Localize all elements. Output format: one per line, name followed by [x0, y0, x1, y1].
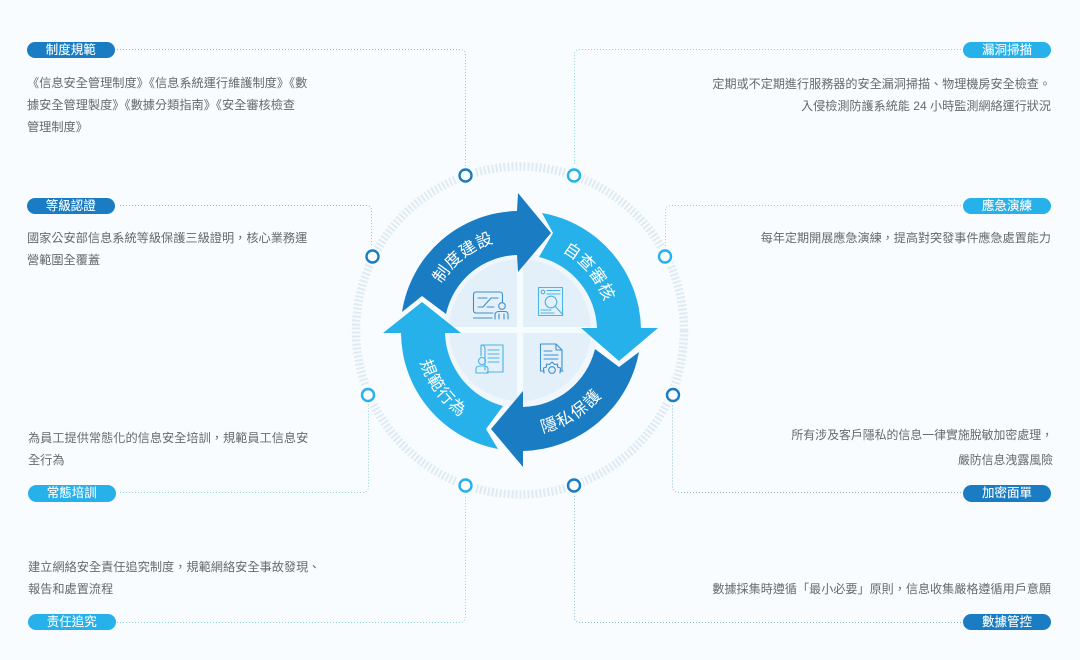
icon: document with gear: [540, 344, 563, 373]
tag: 责任追究: [28, 614, 116, 630]
text: 责任追究: 建立網絡安全責任追究制度，規範網絡安全事故發現、: [28, 560, 320, 574]
tag: 加密面單: 加密面單: [982, 486, 1032, 500]
text: 常態培訓: 為員工提供常態化的信息安全培訓，規範員工信息安: [28, 431, 308, 445]
text: 加密面單: 所有涉及客戶隱私的信息一律實施脫敏加密處理，: [791, 428, 1053, 442]
tag: 加密面單: [963, 485, 1051, 502]
arrow: 制度建設: [402, 193, 551, 314]
arrow: 規範行為: 規範行為: [419, 359, 465, 416]
text: 常態培訓: [28, 431, 308, 467]
tag: 制度規範: [27, 42, 114, 58]
text: 漏洞掃描: 定期或不定期進行服務器的安全漏洞掃描、物理機房安全檢查。: [712, 77, 1051, 91]
arrow: 制度建設: 制度建設: [432, 231, 494, 283]
text: 责任追究: [28, 560, 320, 596]
text: 等級認證: [27, 231, 307, 267]
arrow: 隱私保護: [491, 349, 639, 467]
tag: 常態培訓: [28, 485, 116, 502]
tag: 數據管控: 數據管控: [982, 614, 1032, 628]
text: 责任追究: 報告和處置流程: [28, 582, 113, 596]
tag: 漏洞掃描: 漏洞掃描: [982, 42, 1032, 56]
tag: 數據管控: [963, 614, 1051, 630]
inner disc: [440, 250, 600, 410]
text: 制度規範: 據安全管理製度》《數據分類指南》《安全審核檢查: [27, 98, 295, 112]
connector lines: [117, 50, 961, 622]
tag: 漏洞掃描: [963, 42, 1051, 58]
text: 等級認證: 國家公安部信息系統等級保護三級證明，核心業務運: [27, 231, 307, 245]
icon: presentation with person: [474, 292, 508, 319]
text: 等級認證: 營範圍全覆蓋: [27, 253, 100, 267]
text: 制度規範: 《信息安全管理制度》《信息系統運行維護制度》《數: [27, 76, 307, 90]
tag: 等級認證: [27, 198, 114, 214]
tag: 應急演練: 應急演練: [982, 198, 1032, 212]
connector node halos: [358, 166, 682, 495]
text: 加密面單: [791, 428, 1053, 467]
text: 應急演練: 每年定期開展應急演練，提高對突發事件應急處置能力: [761, 231, 1051, 245]
arrow: 自查審核: [539, 213, 658, 361]
text: 常態培訓: 全行為: [28, 453, 65, 467]
arrow: 規範行為: [383, 302, 503, 449]
icon: scroll with person: [476, 345, 503, 373]
connector nodes: [362, 170, 679, 492]
arrow: 自查審核: 自查審核: [564, 243, 616, 301]
text: 數據管控: 數據採集時遵循「最小必要」原則，信息收集嚴格遵循用戶意願: [712, 582, 1051, 596]
tag: 责任追究: 责任追究: [47, 614, 97, 628]
tag: 等級認證: 等級認證: [46, 198, 96, 212]
icon: document magnifier: [538, 288, 563, 316]
tag: 制度規範: 制度規範: [46, 42, 96, 56]
text: 加密面單: 嚴防信息洩露風險: [958, 453, 1053, 467]
tag: 常態培訓: 常態培訓: [47, 486, 97, 500]
text: 漏洞掃描: 入侵檢測防護系統能 24 小時監測網絡運行狀況: [801, 99, 1051, 113]
text: 制度規範: 管理制度》: [27, 120, 88, 134]
tag: 應急演練: [963, 198, 1051, 214]
text: 漏洞掃描: [712, 77, 1051, 113]
tick ring: [356, 166, 684, 494]
arrow: 隱私保護: 隱私保護: [540, 388, 602, 434]
text: 制度規範: [27, 76, 307, 134]
